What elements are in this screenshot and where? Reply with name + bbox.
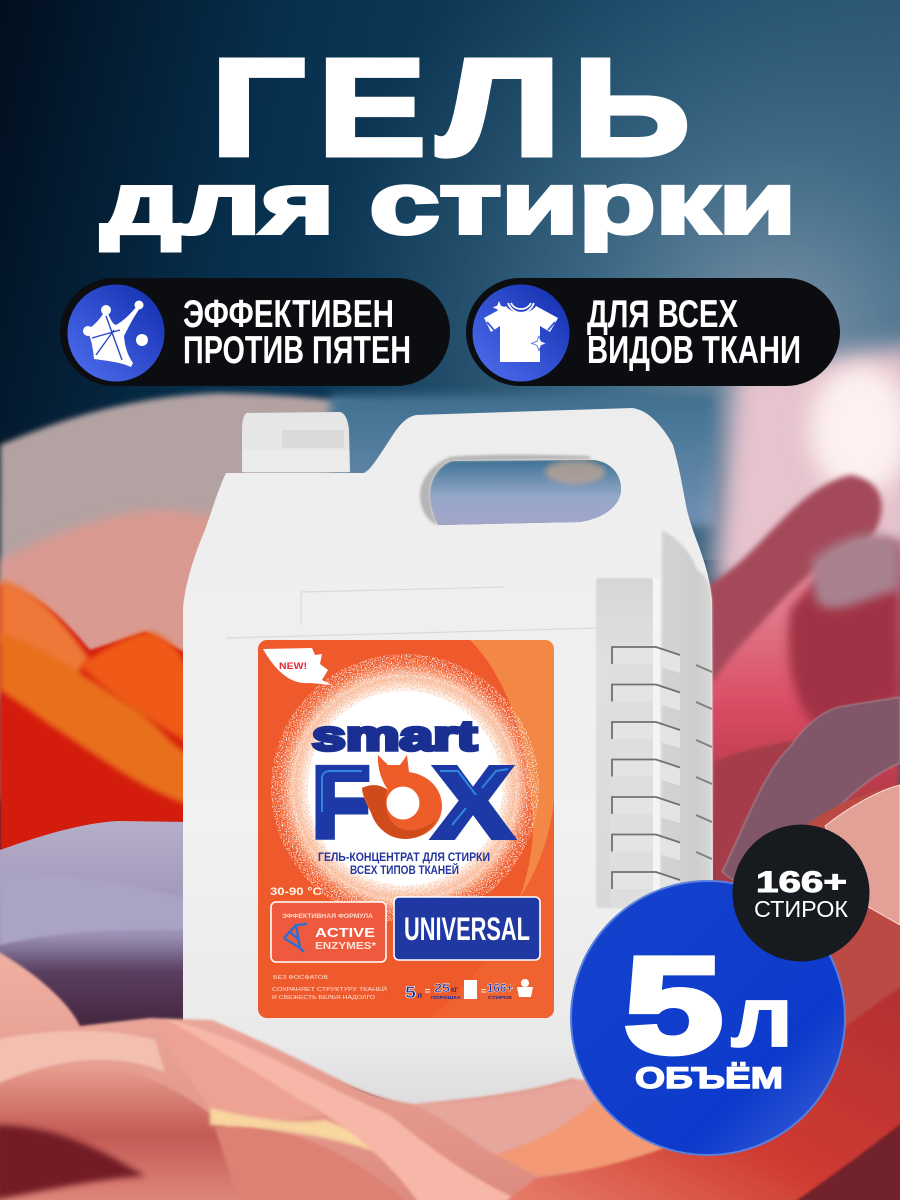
icon: t-shirt: [472, 284, 570, 382]
icon: enzyme molecule: [68, 284, 164, 382]
badge: 166+ washes: 166+: [756, 866, 847, 899]
UNIVERSAL box: UNIVERSAL: [404, 911, 530, 947]
title: ГЕЛЬ: Е: [318, 31, 426, 185]
foreground fabric over bottle base: [0, 950, 900, 1200]
temperature range: 30-90 °C: [270, 886, 322, 898]
NEW! flash: NEW!: [279, 661, 307, 672]
title: ГЕЛЬ: [211, 31, 690, 185]
logo: smart FOX: [310, 721, 518, 840]
badge: 5 л volume: [571, 881, 845, 1155]
equivalence row: 25: [434, 981, 450, 995]
formula box: ENZYMES*: [315, 941, 376, 952]
handle shading: [420, 455, 590, 525]
pill text: [183, 293, 411, 372]
bottle body: [183, 408, 713, 1110]
tagline: [318, 852, 490, 874]
badge: 5 л volume: л: [731, 970, 793, 1064]
product label: [258, 640, 554, 1018]
formula box: ЭФФЕКТИВНАЯ ФОРМУЛА: [282, 913, 373, 920]
embossed panel lines: [226, 587, 600, 638]
subtitle: для стирки: для стирки: [101, 155, 796, 252]
badge: 166+ washes: [732, 824, 870, 962]
tagline: ГЕЛЬ-КОНЦЕНТРАТ ДЛЯ СТИРКИ: [318, 850, 490, 864]
badge: 5 л volume: 5: [624, 929, 723, 1081]
icon: molecule: [284, 924, 307, 952]
legal text: [272, 975, 387, 1001]
UNIVERSAL box: [394, 897, 540, 960]
icon: fox: [362, 755, 442, 839]
equivalence row: [405, 979, 533, 999]
pill text: [587, 293, 801, 372]
logo highlights: [322, 769, 508, 825]
title: ГЕЛЬ: Ь: [573, 31, 690, 185]
equivalence row: =: [481, 986, 486, 996]
logo: smart FOX: X: [434, 747, 512, 859]
logo: smart FOX: smart: [312, 712, 477, 759]
pill text: ПРОТИВ ПЯТЕН: [183, 329, 411, 372]
equivalence row: л: [417, 991, 422, 1000]
equivalence row: 5: [405, 983, 416, 1002]
equivalence row: КГ: [451, 988, 459, 994]
equivalence row: СТИРОК: [488, 995, 512, 1000]
equivalence row: ПОРОШКА: [431, 995, 462, 1000]
title: ГЕЛЬ: Л: [437, 31, 561, 185]
badge: 5 л volume: ОБЪЁМ: [635, 1062, 783, 1095]
NEW! flash: [263, 648, 332, 685]
formula box: ACTIVE: [315, 925, 375, 940]
equivalence row: 166+: [487, 981, 513, 995]
pill text: ВИДОВ ТКАНИ: [587, 329, 801, 372]
logo: smart FOX: F: [312, 747, 370, 859]
handle hole view: [430, 460, 621, 525]
equivalence row: =: [425, 986, 430, 996]
bottle: [183, 408, 713, 1110]
pill: effective against stains: [60, 278, 450, 386]
title: ГЕЛЬ: Г: [211, 31, 305, 185]
side panel with ribs: [596, 530, 712, 908]
legal text: И СВЕЖЕСТЬ БЕЛЬЯ НАДОЛГО: [272, 995, 376, 1001]
pill text: ДЛЯ ВСЕХ: [587, 293, 738, 336]
tagline: ВСЕХ ТИПОВ ТКАНЕЙ: [350, 862, 459, 877]
legal text: БЕЗ ФОСФАТОВ: [273, 975, 328, 981]
legal text: СОХРАНЯЕТ СТРУКТУРУ ТКАНЕЙ: [272, 985, 387, 993]
pill text: ЭФФЕКТИВЕН: [183, 293, 394, 336]
pill: for all fabric types: [466, 278, 840, 386]
bottle cap: [242, 412, 350, 472]
formula box: [271, 902, 386, 962]
badge: 166+ washes: СТИРОК: [754, 896, 849, 922]
